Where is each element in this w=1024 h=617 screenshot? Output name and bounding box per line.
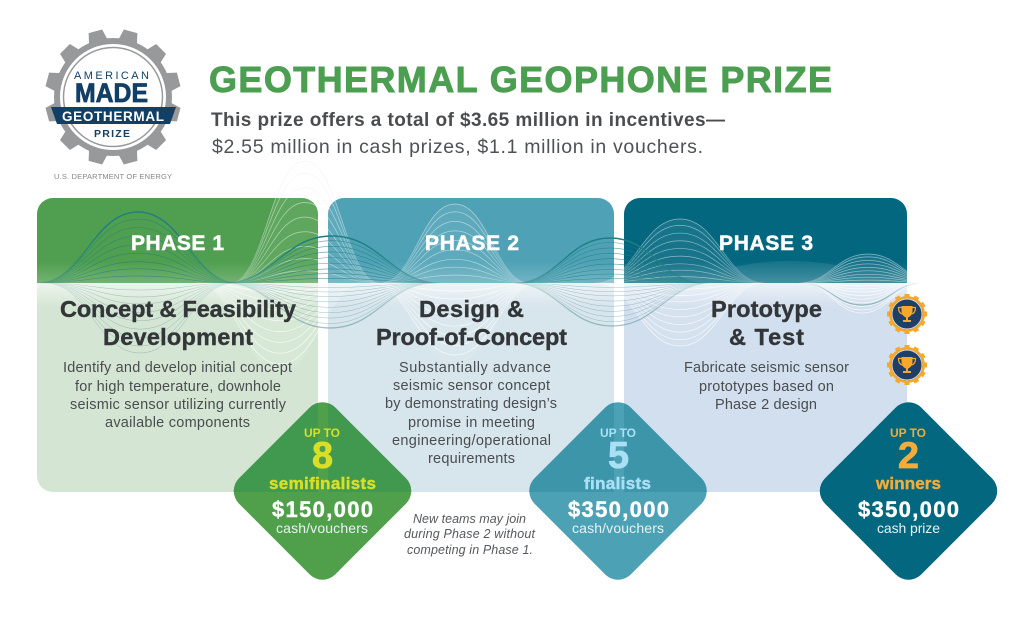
phase 3 heading: [711, 296, 822, 350]
panel: phase 3 content: [684, 232, 849, 413]
seismic wave band: [37, 161, 940, 373]
diamond callout: winners: [812, 395, 1005, 587]
phase 1 description: available components: [105, 415, 250, 431]
logo text: Geothermal: GEOTHERMAL: [62, 109, 164, 124]
phase 2 description: requirements: [428, 451, 515, 467]
phase 2 heading: Proof-of-Concept: [376, 324, 567, 350]
note: new teams: [404, 512, 536, 557]
lower waves, light strands: [195, 283, 922, 364]
prize type: cash/vouchers: [572, 520, 664, 536]
logo banner: [51, 107, 176, 124]
icon: trophy medal 1: [887, 294, 927, 334]
phase 2 heading: [376, 296, 567, 350]
note: new teams: competing in Phase 1.: [407, 543, 533, 557]
count 5: 5: [608, 435, 629, 476]
prize type: cash prize: [877, 520, 940, 536]
phase 2 description: seismic sensor concept: [393, 378, 550, 394]
logo text: Prize: PRIZE: [94, 128, 130, 140]
phase 2 description: [385, 360, 557, 467]
note: new teams: during Phase 2 without: [404, 527, 536, 541]
phase 3 description: Phase 2 design: [715, 397, 817, 413]
up to: UP TO: [600, 426, 636, 440]
phase 2 heading: Design &: [419, 296, 524, 322]
panel: phase 3 background: [624, 198, 907, 492]
subtitle: [211, 110, 725, 158]
semifinalists label: semifinalists: [269, 474, 376, 493]
icon: gear ring: [45, 29, 181, 165]
phase 3 description: Fabricate seismic sensor: [684, 360, 849, 376]
subtitle line 2: $2.55 million in cash prizes, $1.1 million in vouchers.: [212, 136, 703, 158]
upper waves, dark strands: [38, 219, 705, 283]
diamond callout: semifinalists: [234, 402, 412, 580]
phase 2 description: by demonstrating design’s: [385, 396, 557, 412]
count 2: 2: [898, 435, 919, 476]
logo text: department: U.S. DEPARTMENT OF ENERGY: [54, 172, 172, 181]
icon: trophy medal 2: [887, 345, 927, 385]
phase 1 heading: Concept & Feasibility: [60, 296, 296, 322]
logo: American-Made Geothermal Prize gear badge: [45, 29, 181, 181]
prize type: cash/vouchers: [276, 520, 368, 536]
finalists label: finalists: [584, 474, 651, 493]
phase 1 heading: [60, 296, 296, 350]
prize amount: $350,000: [568, 497, 669, 522]
phase 3 heading: & Test: [729, 324, 804, 350]
prize amount: $150,000: [272, 497, 373, 522]
phase 2 description: Substantially advance: [399, 360, 551, 376]
subtitle line 1: This prize offers a total of $3.65 million in incentives—: [211, 110, 725, 131]
phase 3 heading: Prototype: [711, 296, 822, 322]
phase 3 label: PHASE 3: [719, 232, 813, 255]
phase 1 heading: Development: [103, 324, 253, 350]
phase 1 description: seismic sensor utilizing currently: [70, 397, 287, 413]
panel: phase 1 content: [60, 232, 296, 431]
prize amount: $350,000: [858, 497, 959, 522]
phase 1 label: PHASE 1: [131, 232, 224, 255]
phase 3 description: [684, 360, 849, 413]
phase 1 description: for high temperature, downhole: [75, 379, 281, 395]
title: GEOTHERMAL GEOPHONE PRIZE: [209, 59, 832, 100]
diamond callout: finalists: [529, 402, 707, 580]
logo text: American: AMERICAN: [74, 70, 149, 82]
phase 3 description: prototypes based on: [699, 379, 834, 395]
winners label: winners: [875, 474, 941, 493]
count 8: 8: [312, 435, 333, 476]
phase 2 description: promise in meeting: [408, 415, 535, 431]
up to: UP TO: [890, 426, 926, 440]
phase 2 label: PHASE 2: [425, 232, 519, 255]
upper waves, light strands on panels: [234, 198, 907, 283]
panel: phase 1 background: [37, 198, 318, 492]
upper waves, dark outer strands: [38, 212, 705, 283]
filled wave shading: [238, 198, 907, 283]
phase 1 description: [63, 360, 292, 431]
upper light strand, faint above panel: [230, 161, 380, 283]
panel: phase 2 background: [328, 198, 614, 492]
phase 1 description: Identify and develop initial concept: [63, 360, 292, 376]
up to: UP TO: [304, 426, 340, 440]
logo text: Made: MADE: [75, 78, 148, 108]
note: new teams: New teams may join: [413, 512, 526, 526]
panel: phase 2 content: [376, 232, 567, 467]
lower waves, grey-teal strands: [45, 283, 922, 353]
phase 2 description: engineering/operational: [392, 433, 551, 449]
